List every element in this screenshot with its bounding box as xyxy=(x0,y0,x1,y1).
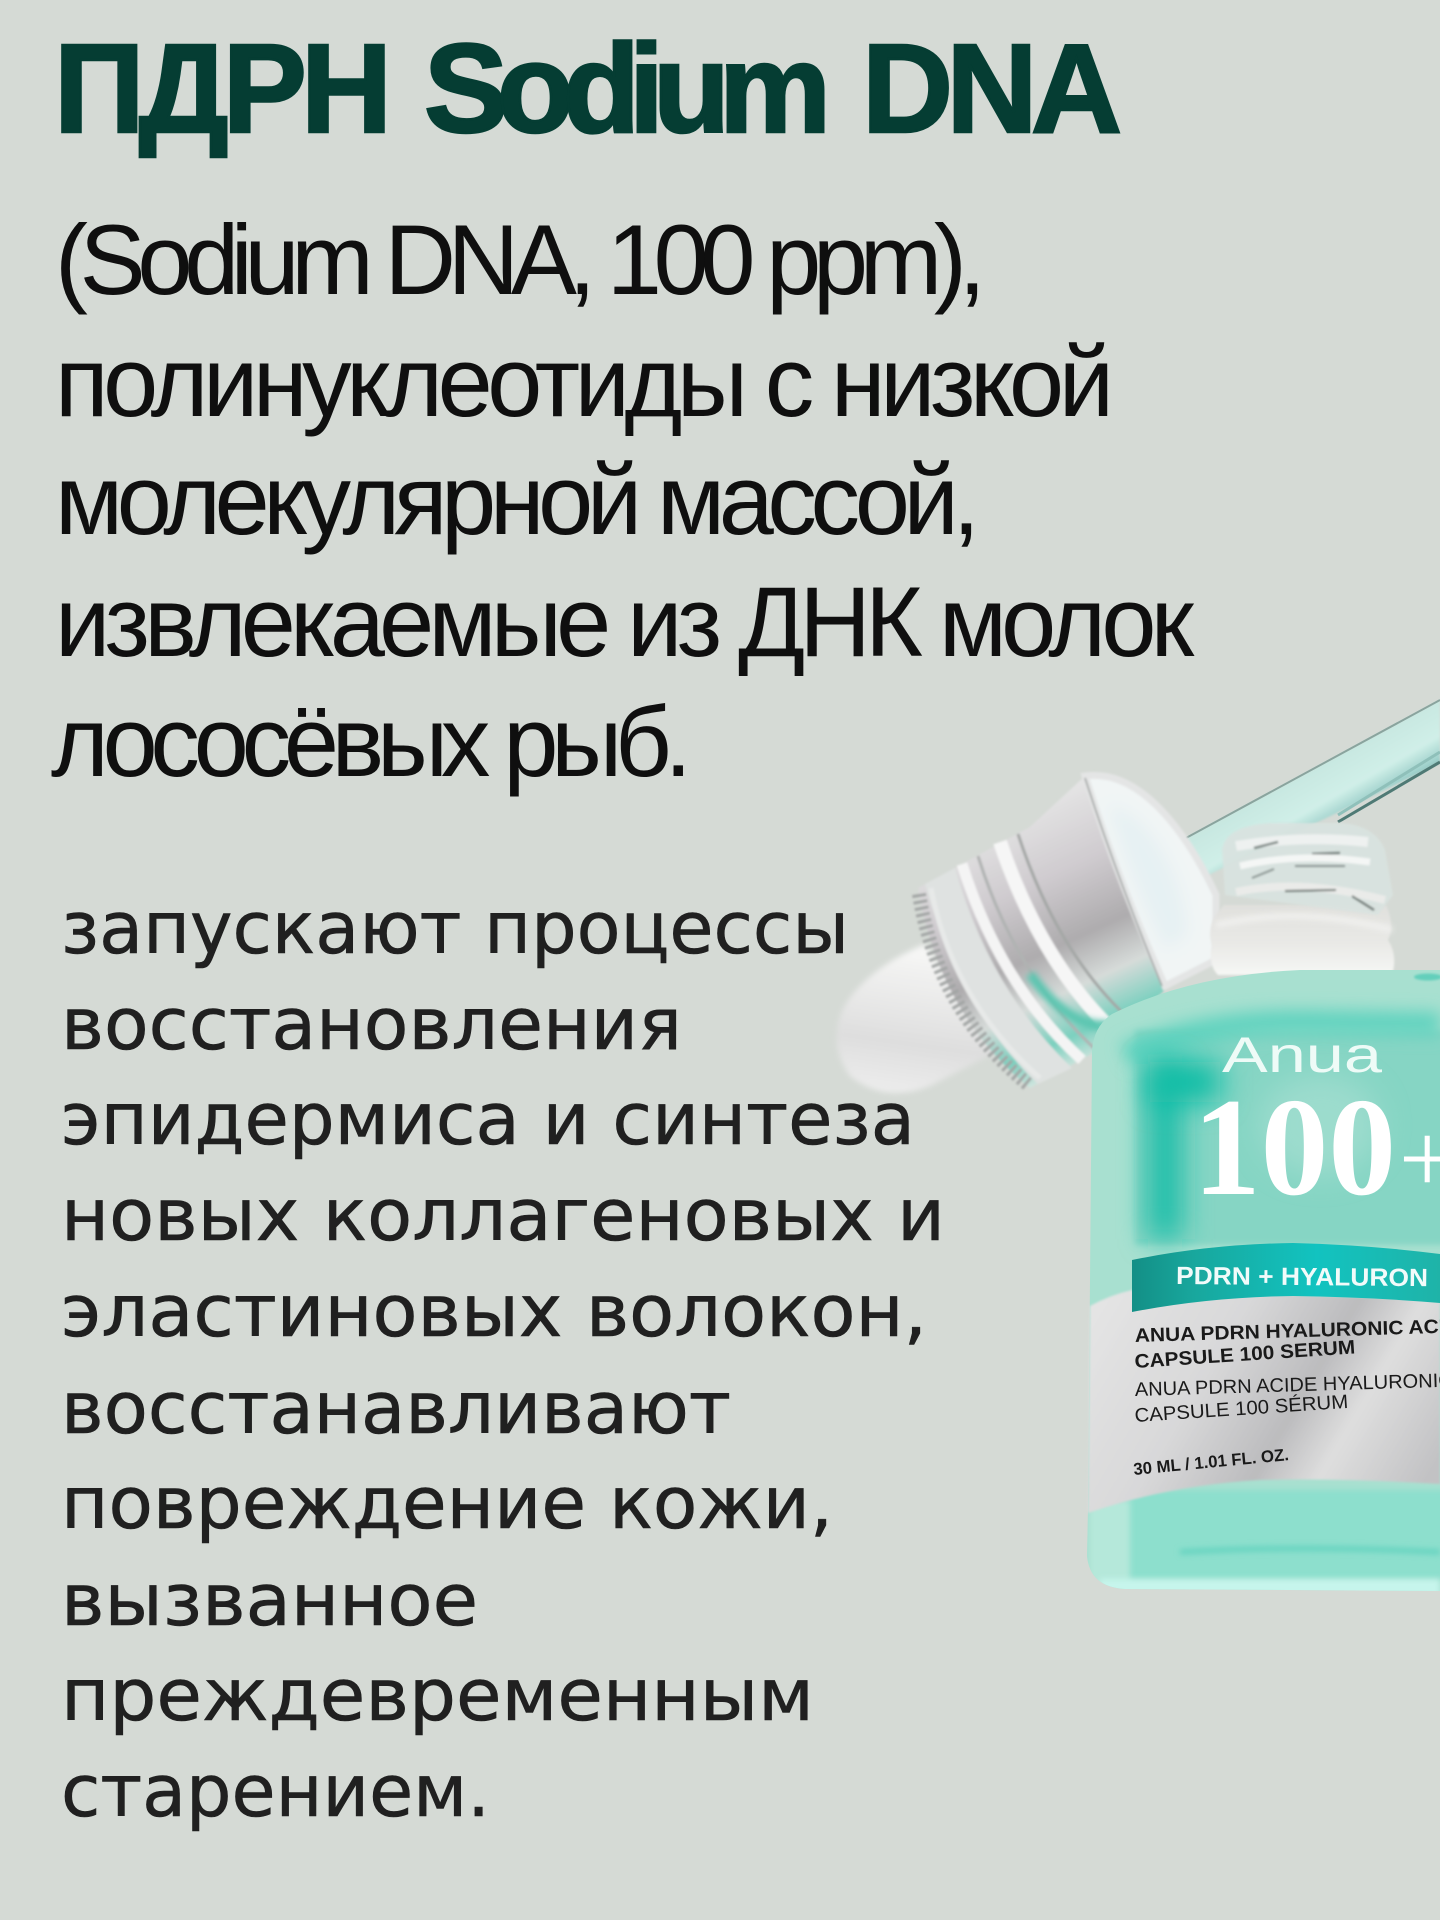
body text block: повреждение кожи, xyxy=(61,1461,833,1545)
label text: CAPSULE 100 SÉRUM xyxy=(1134,1390,1349,1427)
body text block: преждевременным xyxy=(61,1653,814,1737)
bottle brand text: Anua xyxy=(1222,1027,1382,1083)
body text block: эпидермиса и синтеза xyxy=(61,1077,915,1161)
body text block: новых коллагеновых и xyxy=(61,1173,945,1257)
product illustration: serum bottle with dropper xyxy=(837,700,1440,1600)
icon: dropper rubber bulb xyxy=(837,944,1000,1093)
body text block: запускают процессы xyxy=(61,886,849,970)
body text block: вызванное xyxy=(61,1558,478,1642)
subtitle text block: (Sodium DNA, 100 ppm), xyxy=(55,204,986,315)
label text: ANUA PDRN HYALURONIC ACID xyxy=(1134,1315,1440,1347)
label text xyxy=(1133,1315,1440,1479)
title xyxy=(54,18,1122,159)
body text block: старением. xyxy=(61,1749,490,1833)
teal label band xyxy=(1132,1243,1440,1312)
subtitle text block: полинуклеотиды с низкой xyxy=(55,326,1114,437)
title: DNA xyxy=(862,18,1122,159)
icon: bottle glass neck xyxy=(1210,823,1394,975)
label text: ANUA PDRN ACIDE HYALURONIC xyxy=(1134,1370,1440,1401)
icon: liquid drop on shoulder xyxy=(1414,974,1440,980)
subtitle text block: извлекаемые из ДНК молок xyxy=(55,566,1195,677)
subtitle text block: лососёвых рыб. xyxy=(51,686,692,797)
subtitle text block xyxy=(51,204,1195,797)
teal label band: PDRN + HYALURON xyxy=(1176,1262,1428,1292)
icon: glass pipette tube xyxy=(1186,700,1440,880)
cap rim with inner liner xyxy=(1085,775,1216,986)
title: Sodium xyxy=(424,18,831,159)
bottle 100 mark: 100 xyxy=(1193,1070,1396,1225)
body text block: эластиновых волокон, xyxy=(61,1269,927,1353)
body text block: восстановления xyxy=(61,982,682,1066)
title: ПДРН xyxy=(54,18,392,159)
silver label xyxy=(1088,1290,1440,1513)
icon: silver dropper cap xyxy=(918,775,1216,1088)
icon: bottle body xyxy=(1080,960,1440,1600)
body text block: восстанавливают xyxy=(61,1366,731,1450)
body text block xyxy=(61,886,945,1833)
label text: CAPSULE 100 SERUM xyxy=(1134,1336,1356,1373)
subtitle text block: молекулярной массой, xyxy=(55,444,980,555)
label text: 30 ML / 1.01 FL. OZ. xyxy=(1133,1445,1290,1479)
